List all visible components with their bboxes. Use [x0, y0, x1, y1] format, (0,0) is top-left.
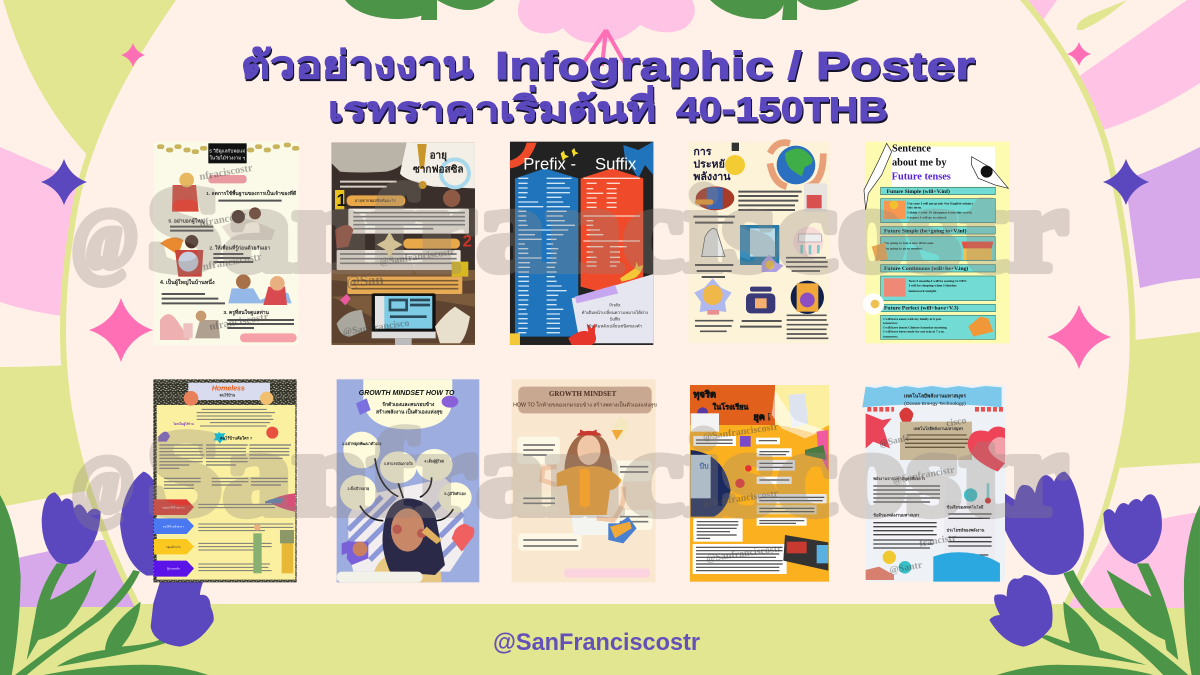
- poster: growth mindset how to: 2.ตั้งเป้าหมาย: [347, 485, 369, 491]
- poster: future tenses: Future Perfect (will+have+V.3): [884, 305, 959, 312]
- poster: parenting tips: 5. อย่าบอกผู้ใหญ่: [168, 218, 205, 226]
- poster: parenting tips: [153, 142, 298, 345]
- title: [241, 45, 975, 129]
- poster: school corruption: @Sanfranciscostr: [702, 421, 779, 443]
- poster: saving energy: การ: [693, 146, 712, 158]
- poster: growth mindset woman: [512, 379, 657, 582]
- large watermarks: Sanfranciscostr: [146, 406, 1068, 541]
- poster: ocean energy technology: (Ocean Energy Technology): [904, 401, 966, 407]
- title: 40-150THB: [676, 91, 888, 129]
- poster: homeless: คนไร้บ้าน: [220, 393, 236, 398]
- poster: future tenses: Future tenses: [892, 171, 951, 182]
- poster: prefix suffix: Prefix -: [523, 154, 576, 173]
- poster: parenting tips: 3. ครูที่สนใจดูแลท่าน: [223, 308, 270, 317]
- poster: prefix suffix: [510, 142, 653, 345]
- poster: future tenses: Future Simple (will+V.inf): [887, 188, 950, 195]
- poster: parenting tips: 2. ให้เพื่อนที่รู้ก่อนด้วยกันเอา: [209, 243, 270, 252]
- poster: fossil age: @Sanfranciscostr: [379, 246, 456, 268]
- poster: future tenses: about me by: [892, 157, 947, 168]
- poster: parenting tips: nfranciscostr: [209, 312, 270, 333]
- poster: future tenses: I'm going to buy a new iPad soon.: [884, 241, 934, 245]
- poster: future tenses: Sentence: [892, 143, 931, 154]
- poster: future tenses: Future Simple (be+going to+V.inf): [884, 227, 967, 234]
- poster: ocean energy technology: @Santr: [889, 560, 924, 576]
- poster: ocean energy technology: ประโยชน์ของพลังงาน: [947, 527, 985, 533]
- poster: ocean energy technology: เทคโนโลยีพลังงานมหาสมุทร: [904, 392, 966, 399]
- poster: ocean energy technology: francistr: [919, 532, 958, 550]
- poster: growth mindset woman: GROWTH MINDSET: [549, 390, 617, 398]
- poster: prefix suffix: คำเติมหลังเปลี่ยนชนิดของคำ: [588, 322, 643, 328]
- right tulips: [989, 472, 1200, 675]
- poster: fossil age: @SanFrancisco: [342, 318, 410, 338]
- poster: ocean energy technology: @Sanfr: [879, 433, 911, 450]
- poster: future tenses: Future Continuous (will+be+V.ing): [884, 265, 968, 272]
- poster: growth mindset how to: 4.เต็มผู้ผู้ใหม่: [424, 458, 445, 465]
- poster: future tenses: homework tonight.: [909, 289, 937, 293]
- large watermarks: Sanfranciscostr: [146, 162, 1068, 297]
- poster: future tenses: I'm sure I will get grade 4 in English subject: [907, 202, 974, 206]
- poster: ocean energy technology: ข้อดีของพลังงานมหาสมุทร: [873, 512, 920, 519]
- title: ตัวอย่างงาน: [241, 45, 473, 87]
- title: Infographic / Poster: [495, 45, 975, 88]
- poster: school corruption: ทุจริต: [693, 389, 716, 400]
- poster: fossil age: 1: [337, 190, 347, 210]
- poster: school corruption: ในโรงเรียน: [713, 401, 748, 411]
- poster: future tenses: I will be sleeping when I finishes: [909, 284, 957, 288]
- title: เรทราคาเริ่มต้นที่: [328, 85, 656, 129]
- poster: homeless: ใครเป็นผู้ไร้บ้าน: [173, 420, 195, 427]
- poster: homeless: คนไร้บ้านชั่วคราว: [163, 524, 184, 528]
- poster: saving energy: พลังงาน: [693, 171, 731, 183]
- large watermarks: @: [72, 442, 134, 530]
- poster: ocean energy technology: cisco: [945, 415, 967, 430]
- poster: ocean energy technology: พลังงานจากมหาสมุทรคืออะไร: [872, 476, 926, 482]
- poster: parenting tips: 4. เป็นผู้ใหญ่ในบ้านหนึ่ง: [160, 278, 215, 287]
- footer handle: @SanFranciscostr: [493, 629, 700, 656]
- poster: school corruption: [690, 385, 829, 582]
- poster: homeless: กลุ่มเฝ้าระวัง: [166, 545, 181, 550]
- poster: future tenses: I'm going to go to market.: [884, 246, 923, 250]
- poster: school corruption: @Sanfranciscostr: [706, 543, 783, 565]
- poster: saving energy: ประหยัด: [693, 158, 732, 170]
- poster: homeless: กลุ่มคนไร้บ้านถาวร: [162, 505, 185, 510]
- poster: growth mindset woman: HOW TO โกท้ายขลองเกมรอบข้าง สร้างพลางเป็นตัวเองแห่งสุข: [513, 401, 657, 409]
- poster: future tenses: I think Covid-19 disappear from this world.: [907, 210, 972, 214]
- poster: school corruption: @Sanfranciscostr: [702, 488, 779, 510]
- poster: fossil age: 2: [463, 232, 472, 251]
- poster: fossil age: อายุ: [430, 150, 447, 161]
- large watermarks: @: [72, 193, 138, 287]
- poster: growth mindset how to: 5.ภูมิใจตัวเอง: [444, 491, 466, 497]
- poster: growth mindset how to: สร้างพลังงาน เป็นตัวเองแห่งสุข: [376, 407, 443, 415]
- poster: future tenses: I expect I will go to school.: [907, 216, 947, 220]
- poster: ocean energy technology: [862, 385, 1005, 582]
- poster: future tenses: I will have been ready for our trip at 7 a.m.: [883, 330, 945, 334]
- poster: ocean energy technology: เทคโนโลยีพลังงานมหาสมุทร: [913, 426, 964, 432]
- poster: school corruption: ยุค !: [753, 412, 771, 423]
- poster: prefix suffix: Prefix: [609, 303, 621, 308]
- poster: fossil age: [332, 143, 475, 345]
- top flower and leaves: [345, 0, 859, 66]
- poster: future tenses: this term.: [907, 206, 922, 210]
- poster: fossil age: @San: [346, 272, 384, 291]
- poster: future tenses: [863, 142, 1010, 343]
- poster: parenting tips: nfranciscostr: [202, 252, 263, 273]
- poster: fossil age: ซากฟอสซิล: [413, 164, 464, 176]
- poster: future tenses: Next 5 months,I will be seating O-NET.: [909, 279, 967, 283]
- poster: growth mindset how to: 3.หาแรงบันดาลใจ: [384, 461, 413, 466]
- large watermarks: [72, 162, 1068, 541]
- poster: fossil age: อายุซากฟอสซิลคืออะไร: [355, 198, 397, 204]
- poster: saving energy: [688, 142, 830, 343]
- poster: prefix suffix: Suffix: [595, 154, 637, 173]
- poster: homeless: Homeless: [212, 386, 245, 393]
- poster: parenting tips: nfrancostr: [199, 210, 248, 230]
- poster: homeless: คนไร้บ้านคือใคร ?: [220, 434, 253, 440]
- sparkle stars: [41, 42, 1149, 369]
- poster: future tenses: tomorrow.: [883, 334, 898, 338]
- poster: parenting tips: nfraciscostr: [199, 163, 254, 183]
- poster: ocean energy technology: @Sanfrancistr: [892, 464, 956, 486]
- poster: homeless: [153, 379, 297, 582]
- left tulips: [0, 472, 214, 675]
- poster: school corruption: ปับ: [699, 461, 709, 470]
- poster: homeless: ผู้ประสบภัย: [167, 566, 180, 570]
- poster: prefix suffix: คำเติมหน้าเปลี่ยนความหมายได้ต่าง: [582, 309, 648, 315]
- poster: ocean energy technology: ข้อเสียของเทคโนโลยี: [947, 503, 984, 509]
- poster: future tenses: I will have eaten with my family at 6 p.m.: [883, 317, 942, 321]
- poster: parenting tips: 1. ลดการใช้พื้นฐานของการเป็นเจ้าของที่ดี: [206, 188, 296, 197]
- poster: growth mindset how to: 1.อย่าหยุดพัฒนาตัวเอง: [342, 441, 381, 447]
- poster: parenting tips: ในวัยไม้ร่วงงาม ๆ: [210, 154, 245, 161]
- poster: future tenses: I will have learnt Chinese Saturday morning.: [883, 326, 948, 330]
- poster: growth mindset how to: รักตัวเองและคนรอบข้าง: [382, 401, 435, 408]
- poster: future tenses: tomorrow.: [883, 321, 898, 325]
- poster: prefix suffix: Suffix: [610, 317, 621, 322]
- poster: parenting tips: 5 วิธีดูแลกับพ่อแม่: [209, 148, 245, 155]
- poster: growth mindset how to: [337, 379, 479, 582]
- poster: growth mindset how to: GROWTH MINDSET HOW TO: [359, 390, 455, 397]
